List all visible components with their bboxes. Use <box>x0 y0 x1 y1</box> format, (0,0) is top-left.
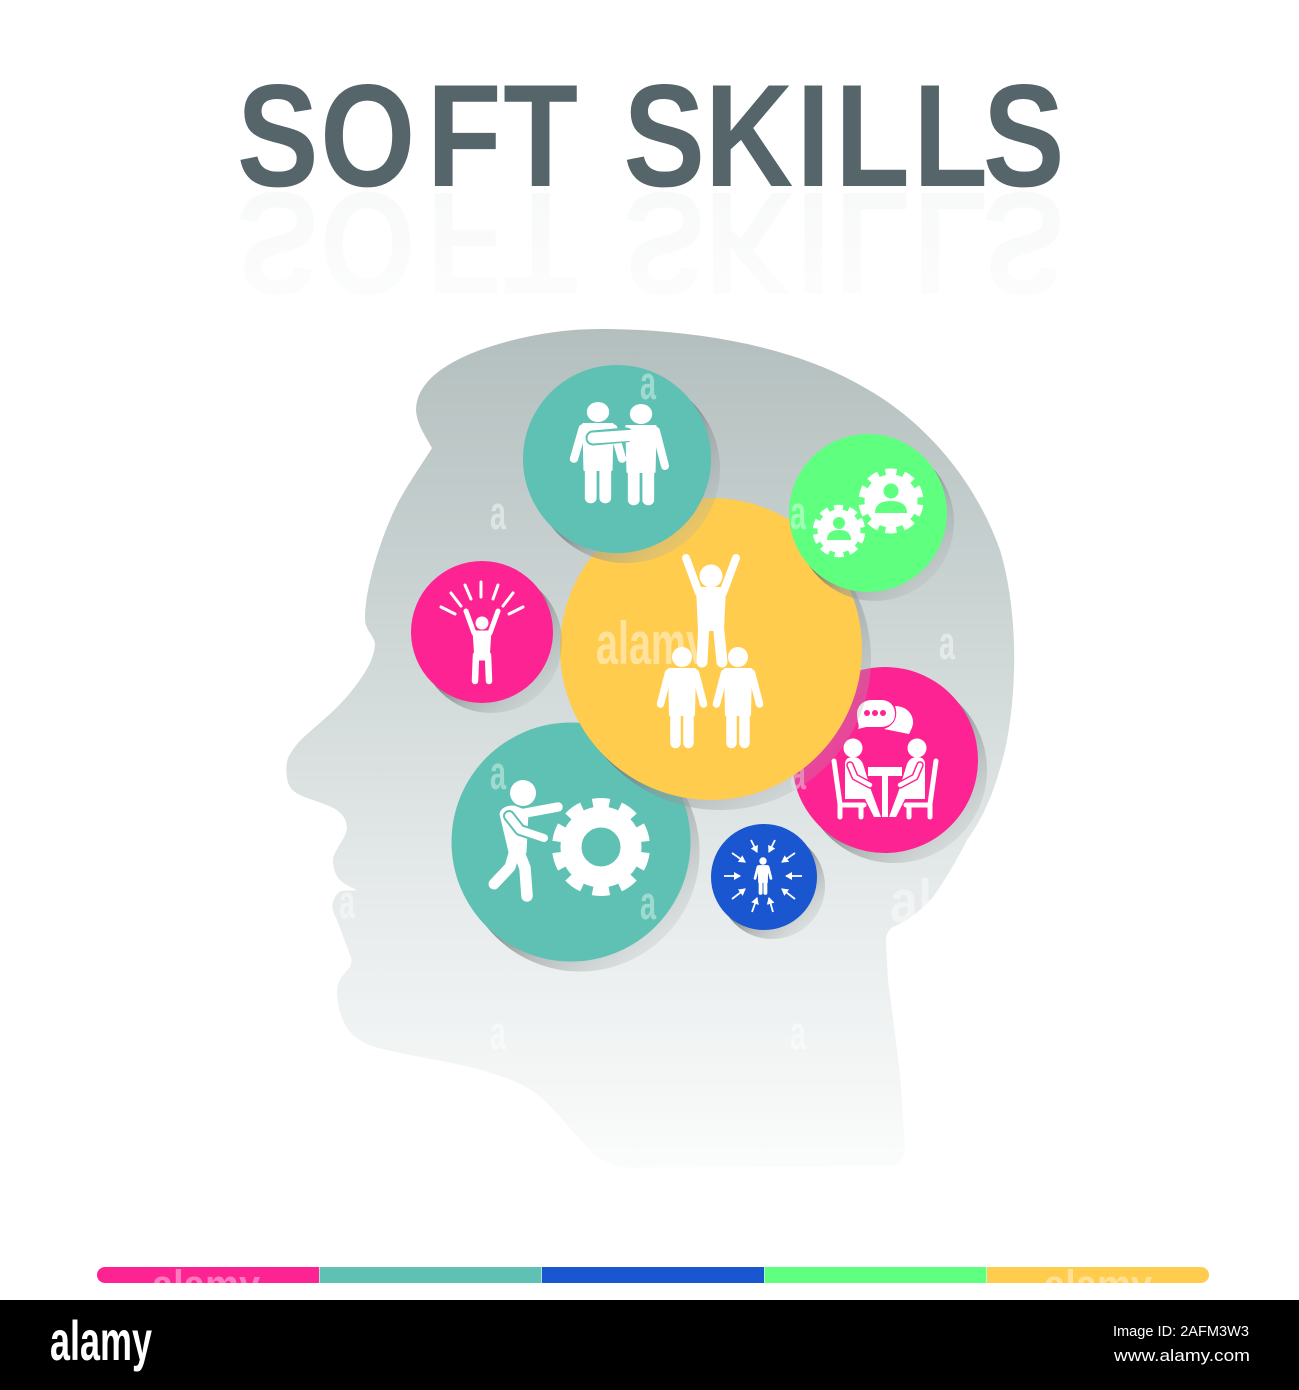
watermarks on head: a <box>490 486 507 539</box>
head silhouette <box>286 329 1014 1168</box>
circle: teal teamwork gear: a <box>490 746 507 799</box>
circle: teal teamwork gear: a <box>640 876 657 929</box>
icon: two gears with people <box>810 465 927 560</box>
circle: blue focus <box>711 824 825 939</box>
colour bar: alamy <box>1044 1263 1153 1307</box>
circle: teal colleagues: a <box>640 356 657 409</box>
title: SOFT SKILLS <box>237 54 1065 217</box>
watermark on yellow: alamy <box>596 610 708 677</box>
circle: pink communication <box>790 667 987 863</box>
circle: teal colleagues <box>523 356 720 563</box>
watermarks on head: a <box>939 616 956 669</box>
watermarks on head <box>339 486 956 1059</box>
image id: Image ID: 2AFM3W3 <box>1113 1323 1249 1340</box>
icon: large gear <box>546 792 656 902</box>
icon: person standing on two people <box>660 558 760 743</box>
watermarks on head: a <box>339 875 356 928</box>
colour bar: alamy <box>152 1263 261 1307</box>
footer band <box>0 1300 1299 1390</box>
circle: green gears <box>789 434 954 601</box>
watermarks on head: al <box>890 868 932 935</box>
circle: pink achievement <box>411 561 562 713</box>
footer logo: alamy <box>50 1309 152 1372</box>
circle: green gears: a <box>790 486 807 539</box>
icon: two people arm over shoulder <box>574 402 665 500</box>
icon: person celebrating with rays <box>441 582 523 681</box>
icon: person pushing gear <box>494 780 656 902</box>
circle: pink communication: a <box>790 746 807 799</box>
circle: yellow team support <box>560 498 871 810</box>
watermarks on head: a <box>490 1006 507 1059</box>
icon: two people talking at a table <box>834 700 936 817</box>
icon: person surrounded by arrows <box>724 840 802 912</box>
watermarks on head: a <box>790 1006 807 1059</box>
colour bar <box>97 1267 1209 1283</box>
website: www.alamy.com <box>1113 1346 1250 1365</box>
circle: teal teamwork gear <box>452 722 700 972</box>
title reflection: SOFT SKILLS <box>237 162 1065 325</box>
